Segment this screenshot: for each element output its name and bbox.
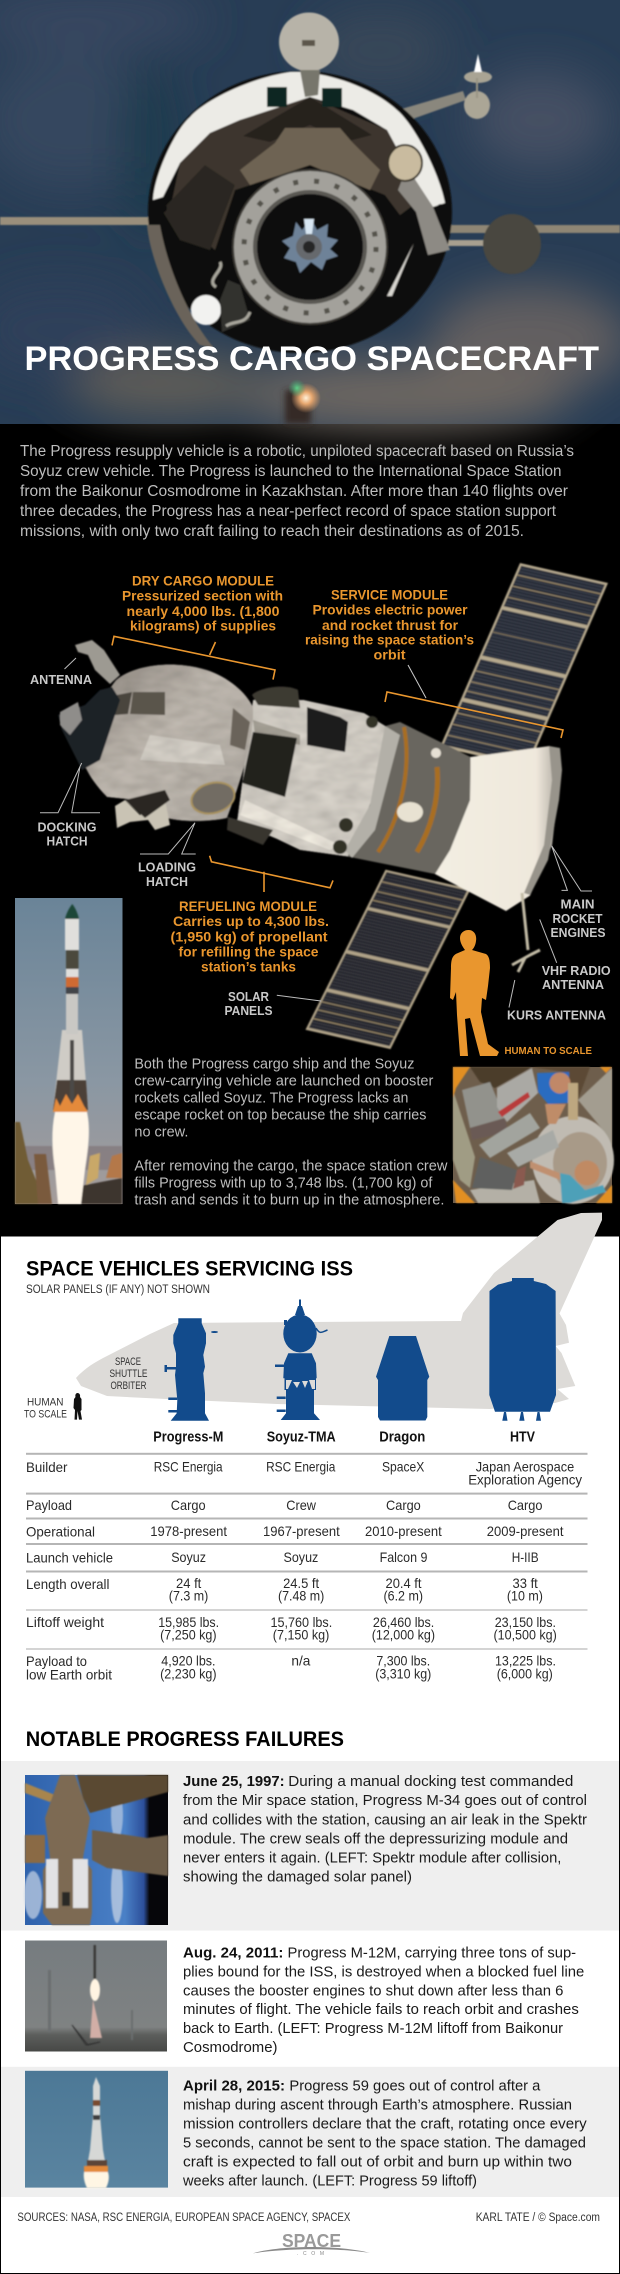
- column headers: [153, 1430, 535, 1446]
- heading: notable failures: NOTABLE PROGRESS FAILURES: [26, 1728, 344, 1751]
- label: service module: orbit: [374, 646, 406, 662]
- upper solar panel: [440, 563, 608, 767]
- row: payload: [26, 1497, 543, 1513]
- text: June 25, 1997: [183, 1774, 587, 1886]
- white disc with cables: [191, 295, 221, 325]
- row: length overall: 24.5 ft: [283, 1575, 319, 1591]
- dry cargo module: [83, 665, 253, 821]
- label: loading hatch: HATCH: [146, 874, 188, 889]
- row: operational: Operational: [26, 1524, 95, 1540]
- row: liftoff weight: 15,985 lbs.: [158, 1614, 219, 1630]
- label: VHF radio antenna: [540, 919, 611, 992]
- label: main rocket engines: ROCKET: [552, 911, 603, 926]
- logo: Space.com: SPACE: [282, 2231, 341, 2251]
- row: length overall: 33 ft: [512, 1575, 538, 1591]
- left panel: [25, 1835, 45, 1863]
- body shell: [148, 71, 452, 353]
- icon: orange human silhouette: [450, 930, 499, 1056]
- text: April 28, 2015: Progress 59 goes out of control after a: [289, 2079, 541, 2095]
- top dome: [252, 687, 300, 708]
- row: operational: 2009-present: [487, 1523, 564, 1539]
- text: April 28, 2015: weeks after launch. (LEFT: Progress 59 liftoff): [182, 2174, 477, 2190]
- under-roof machinery: [170, 97, 420, 250]
- front docking assembly: [58, 687, 120, 770]
- label: antenna: ANTENNA: [30, 672, 93, 687]
- vehicle: Progress-M: [164, 1318, 218, 1421]
- label: main rocket engines: MAIN: [560, 897, 594, 912]
- foil-covered modules: [83, 665, 386, 857]
- row: payload: Cargo: [171, 1497, 206, 1513]
- text: April 28, 2015: April 28, 2015:: [183, 2079, 285, 2095]
- photo: Progress 59 liftoff: [25, 2071, 168, 2188]
- text: April 28, 2015: mishap during ascent through Earth’s atmosphere. Russian: [183, 2098, 572, 2114]
- row: payload to low Earth orbit: [26, 1652, 556, 1682]
- row: payload to low Earth orbit: 13,225 lbs.: [495, 1652, 556, 1668]
- row: launch vehicle: Falcon 9: [380, 1549, 428, 1565]
- label: service module: raising the space station’s: [305, 632, 474, 648]
- left boom: [0, 217, 154, 225]
- label: VHF radio antenna: VHF RADIO: [542, 963, 611, 978]
- label: Kurs antenna: [507, 980, 607, 1023]
- photo: Progress rocket liftoff: [15, 898, 122, 1204]
- column headers: Soyuz-TMA: [267, 1430, 336, 1446]
- label: docking hatch: DOCKING: [38, 819, 96, 834]
- label: refueling module: station’s tanks: [201, 958, 296, 974]
- intro paragraph: three decades, the Progress has a near-perfect record of space station support: [20, 503, 557, 520]
- row: liftoff weight: 15,760 lbs.: [270, 1614, 332, 1630]
- title: PROGRESS CARGO SPACECRAFT: [24, 340, 599, 378]
- row: payload: Crew: [286, 1497, 317, 1513]
- row: builder: Japan Aerospace: [476, 1458, 574, 1474]
- text: Aug. 24, 2011: causes the booster engines to shut down after less than 6: [183, 1983, 563, 1999]
- logo: Space.com: [253, 2231, 370, 2257]
- white upper crescent: [153, 72, 445, 207]
- flame: [52, 1112, 89, 1204]
- boosters: [53, 1030, 88, 1110]
- band: 1997 failure: [1, 1761, 619, 1931]
- vehicle: HTV: [489, 1278, 556, 1421]
- intro paragraph: missions, with only two craft failing to reach their destinations as of 2015.: [20, 523, 524, 540]
- row: builder: RSC Energia: [154, 1458, 223, 1474]
- vehicle: Dragon: [376, 1336, 429, 1420]
- row: payload to low Earth orbit: (2,230 kg): [160, 1665, 217, 1681]
- label: space shuttle orbiter: ORBITER: [110, 1380, 147, 1392]
- row: liftoff weight: (7,150 kg): [273, 1626, 329, 1642]
- row: operational: 1967-present: [263, 1523, 340, 1539]
- service module stripes: [378, 727, 406, 852]
- docking ring: [233, 170, 387, 324]
- person upper: [537, 1072, 569, 1104]
- nose fairing: [65, 904, 79, 919]
- oval port: [397, 802, 423, 822]
- upper left panel: [25, 1783, 55, 1802]
- paragraph: launch and trash disposal: [134, 1056, 448, 1208]
- row: payload to low Earth orbit: 4,920 lbs.: [161, 1652, 216, 1668]
- right boom: [445, 225, 620, 233]
- cloud streaks: [111, 1791, 123, 1839]
- row: payload: Cargo: [508, 1497, 543, 1513]
- label: refueling module: REFUELING MODULE: [179, 898, 317, 914]
- column headers: Progress-M: [153, 1430, 223, 1446]
- row: liftoff weight: (12,000 kg): [372, 1626, 435, 1642]
- text: June 25, 1997: During a manual docking test commanded: [288, 1774, 573, 1790]
- orange rim corners: [453, 1067, 470, 1098]
- text: Aug. 24, 2011: back to Earth. (LEFT: Progress M-12M liftoff from Baikonur: [183, 2021, 563, 2037]
- paragraph: launch and trash disposal: no crew.: [134, 1123, 188, 1140]
- label: dry cargo module: Pressurized section with: [122, 588, 283, 604]
- text: Aug. 24, 2011: Aug. 24, 2011:: [183, 1945, 283, 1961]
- paragraph: launch and trash disposal: escape rocket on top because the ship carries: [134, 1106, 426, 1124]
- row: launch vehicle: Soyuz: [171, 1549, 206, 1565]
- row: length overall: (7.3 m): [169, 1588, 208, 1604]
- row: length overall: (6.2 m): [384, 1588, 423, 1604]
- windows: [267, 87, 287, 107]
- text: June 25, 1997: from the Mir space station, Progress M-34 goes out of control: [183, 1793, 587, 1809]
- black panel on refueling module: [242, 732, 297, 797]
- label: human to scale: HUMAN: [27, 1397, 64, 1409]
- top dish: [279, 12, 339, 72]
- row: payload to low Earth orbit: Payload to: [26, 1653, 87, 1669]
- row: length overall: Length overall: [26, 1576, 109, 1592]
- label: dry cargo module: DRY CARGO MODULE: [132, 572, 274, 588]
- heading: space vehicles: SPACE VEHICLES SERVICING ISS: [26, 1257, 353, 1280]
- label: solar panels: SOLAR: [228, 989, 270, 1004]
- right antenna arm: [398, 54, 492, 122]
- intro paragraph: [20, 443, 574, 540]
- label: human to scale: [24, 1397, 67, 1421]
- photo: Progress M-12M liftoff: [25, 1940, 167, 2052]
- intro paragraph: Soyuz crew vehicle. The Progress is launched to the International Space Station: [20, 463, 562, 480]
- row: payload to low Earth orbit: n/a: [291, 1652, 311, 1668]
- text: Aug. 24, 2011: minutes of flight. The vehicle fails to reach orbit and crashes: [183, 2002, 579, 2018]
- row: payload: Payload: [26, 1497, 72, 1513]
- flare: [291, 383, 321, 413]
- label: loading hatch: [138, 823, 196, 889]
- footer: sources: SOURCES: NASA, RSC ENERGIA, EUROPEAN SPACE AGENCY, SPACEX: [17, 2212, 351, 2224]
- text: April 28, 2015: 5 seconds, cannot be sent to the space station. The damaged: [183, 2136, 586, 2152]
- label: Kurs antenna: KURS ANTENNA: [507, 1008, 607, 1023]
- right panel: [92, 1830, 168, 1876]
- engine section: [435, 746, 562, 911]
- paragraph: launch and trash disposal: After removing the cargo, the space station crew: [134, 1158, 448, 1174]
- row: payload to low Earth orbit: 7,300 lbs.: [376, 1652, 430, 1668]
- row: launch vehicle: Launch vehicle: [26, 1550, 113, 1566]
- upper right panels: [77, 1775, 168, 1813]
- row: liftoff weight: 26,460 lbs.: [373, 1614, 434, 1630]
- spacecraft diagram: Progress side view: [58, 563, 608, 1049]
- row: builder: SpaceX: [382, 1458, 425, 1474]
- text: June 25, 1997: module. The crew seals off the depressurizing module and: [183, 1832, 568, 1848]
- green lens flare: [288, 379, 306, 397]
- label: solar panels: [224, 989, 321, 1018]
- band: 2015 failure: [1, 2067, 619, 2197]
- row: liftoff weight: [26, 1614, 557, 1642]
- text: June 25, 1997: never enters it again. (LEFT: Spektr module after collision,: [183, 1850, 561, 1866]
- row: payload to low Earth orbit: (3,310 kg): [375, 1665, 431, 1681]
- docking probe: [282, 219, 338, 273]
- lower stub: [285, 390, 311, 424]
- subheading: solar panels note: SOLAR PANELS (IF ANY) NOT SHOWN: [26, 1284, 210, 1296]
- label: antenna: [30, 658, 93, 687]
- text: Aug. 24, 2011: Progress M-12M, carrying three tons of sup-: [288, 1945, 576, 1961]
- text: June 25, 1997: June 25, 1997:: [183, 1774, 285, 1790]
- label: refueling module: for refilling the space: [178, 943, 319, 959]
- module body: [43, 1775, 92, 1925]
- row: builder: Builder: [26, 1459, 68, 1475]
- loading hatch ring: [188, 778, 238, 818]
- shuttle orbiter silhouette: [76, 1213, 602, 1409]
- row: operational: [26, 1523, 564, 1540]
- paragraph: launch and trash disposal: crew-carrying vehicle are launched on booster: [134, 1072, 433, 1090]
- row: length overall: (7.48 m): [278, 1588, 324, 1604]
- petals: [115, 800, 170, 830]
- service module grey section: [348, 722, 470, 874]
- row: payload to low Earth orbit: (6,000 kg): [497, 1665, 553, 1681]
- label: service module: and rocket thrust for: [322, 617, 459, 633]
- label: main rocket engines: [550, 846, 606, 940]
- paragraph: launch and trash disposal: rockets called Soyuz. The Progress lacks an: [134, 1090, 408, 1106]
- comparison table: [26, 1430, 588, 1682]
- label: human to scale: TO SCALE: [24, 1409, 67, 1421]
- label: dry cargo module: nearly 4,000 lbs. (1,800: [126, 603, 280, 619]
- label: solar panels: PANELS: [224, 1003, 273, 1018]
- row: length overall: [26, 1575, 543, 1604]
- row: length overall: 20.4 ft: [386, 1575, 422, 1591]
- cargo bags: [462, 1082, 505, 1128]
- antenna stalk: [75, 640, 120, 684]
- KURS antenna: [512, 893, 540, 972]
- row: builder: [26, 1458, 582, 1488]
- control panel: [568, 1083, 578, 1120]
- tan disc: [388, 145, 422, 181]
- text: April 28, 2015: craft is expected to fall out of orbit and burn up within two: [183, 2155, 572, 2171]
- row: payload: Cargo: [386, 1497, 421, 1513]
- refueling module: [237, 700, 386, 857]
- right grey dish: [483, 214, 541, 274]
- text: June 25, 1997: showing the damaged solar panel): [183, 1870, 412, 1886]
- row: builder: RSC Energia: [266, 1458, 335, 1474]
- vehicle: Soyuz-TMA: [275, 1300, 328, 1420]
- text: Aug. 24, 2011: plies bound for the ISS, is destroyed when a blocked fuel line: [183, 1964, 584, 1980]
- paragraph: launch and trash disposal: trash and sends it to burn up in the atmosphere.: [134, 1191, 444, 1208]
- hero photo: Progress spacecraft in orbit: [0, 0, 620, 430]
- label: service module: [305, 586, 563, 738]
- row: liftoff weight: Liftoff weight: [26, 1614, 104, 1630]
- row: liftoff weight: 23,150 lbs.: [495, 1614, 556, 1630]
- row: operational: 1978-present: [150, 1523, 227, 1539]
- label: dry cargo module: kilograms) of supplies: [130, 618, 276, 634]
- row: launch vehicle: H-IIB: [512, 1549, 539, 1565]
- text: Aug. 24, 2011: Cosmodrome): [183, 2040, 278, 2056]
- footer: credit: KARL TATE / © Space.com: [476, 2212, 600, 2224]
- label: main rocket engines: ENGINES: [550, 925, 606, 940]
- ground structures: [15, 1146, 122, 1170]
- exhaust fire: [53, 1094, 88, 1112]
- paragraph: launch and trash disposal: Both the Progress cargo ship and the Soyuz: [134, 1056, 414, 1073]
- text: June 25, 1997: and collides with the station, causing an air leak in the Spektr: [183, 1812, 587, 1828]
- label: VHF radio antenna: ANTENNA: [542, 977, 605, 992]
- row: liftoff weight: (7,250 kg): [160, 1626, 217, 1642]
- label: service module: Provides electric power: [312, 602, 468, 618]
- label: space shuttle orbiter: [110, 1356, 148, 1392]
- row: payload to low Earth orbit: low Earth orbit: [26, 1666, 112, 1682]
- row: builder: Exploration Agency: [468, 1472, 582, 1488]
- core body: [65, 919, 79, 950]
- paragraph: launch and trash disposal: fills Progress with up to 3,748 lbs. (1,700 kg) of: [134, 1174, 433, 1191]
- text: April 28, 2015: [182, 2079, 587, 2190]
- intro paragraph: from the Baikonur Cosmodrome in Kazakhstan. After more than 140 flights over: [20, 483, 568, 500]
- label: space shuttle orbiter: SHUTTLE: [110, 1368, 148, 1380]
- label: loading hatch: LOADING: [138, 860, 196, 875]
- person lower: [530, 1161, 562, 1180]
- row: operational: 2010-present: [365, 1523, 442, 1539]
- label: dry cargo module: [112, 572, 283, 680]
- label: refueling module: (1,950 kg) of propellant: [170, 929, 328, 945]
- text: Aug. 24, 2011: [183, 1945, 584, 2056]
- label: service module: SERVICE MODULE: [331, 586, 448, 602]
- label: human to scale: HUMAN TO SCALE: [504, 1045, 592, 1057]
- row: launch vehicle: [26, 1549, 539, 1566]
- interior walls: [470, 1067, 532, 1088]
- row: length overall: (10 m): [507, 1588, 543, 1604]
- main thruster knobs: [333, 716, 441, 854]
- icon: small human silhouette: [74, 1393, 82, 1420]
- label: refueling module: Carries up to 4,300 lbs.: [173, 913, 329, 929]
- white comparison panel: [1, 1236, 619, 2273]
- text: April 28, 2015: mission controllers declare that the craft, rotating once every: [183, 2117, 587, 2133]
- label: docking hatch: [38, 763, 100, 849]
- black small port pads: [157, 203, 167, 213]
- photo: crew with cargo inside Progress: [453, 1067, 614, 1204]
- intro paragraph: The Progress resupply vehicle is a robotic, unpiloted spacecraft based on Russia’s: [20, 443, 574, 460]
- logo: Space.com: .COM: [297, 2251, 324, 2257]
- hatch ring: [532, 1116, 614, 1204]
- row: liftoff weight: (10,500 kg): [494, 1626, 557, 1642]
- label: space shuttle orbiter: SPACE: [115, 1356, 141, 1368]
- row: launch vehicle: Soyuz: [284, 1549, 318, 1565]
- column headers: Dragon: [379, 1430, 425, 1446]
- label: refueling module: [170, 856, 333, 974]
- lower solar panel: [306, 870, 470, 1049]
- row: length overall: 24 ft: [176, 1575, 201, 1591]
- label: docking hatch: HATCH: [46, 834, 88, 849]
- column headers: HTV: [510, 1430, 535, 1446]
- photo: Spektr module after collision: [24, 1775, 168, 1925]
